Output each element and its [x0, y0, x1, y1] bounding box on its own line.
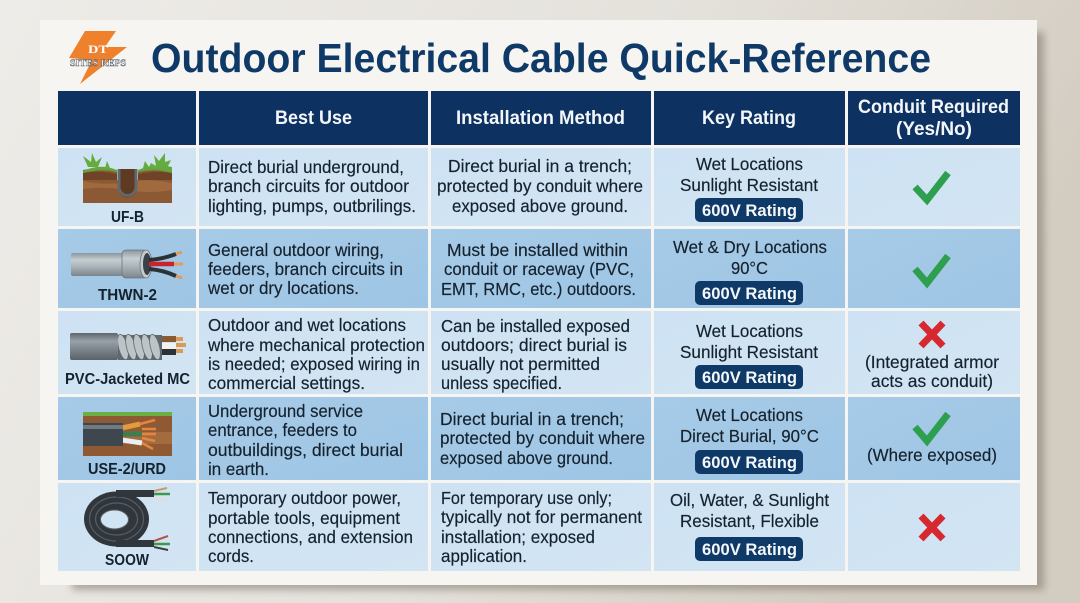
- key rating: USE-2/URD: Direct Burial, 90°C: [680, 426, 819, 446]
- conduit note: PVC-Jacketed MC: (Integrated armor: [865, 352, 999, 372]
- table header row: [58, 91, 1020, 145]
- best use: USE-2/URD: entrance, feeders to: [208, 420, 357, 440]
- best use: PVC-Jacketed MC: [207, 315, 425, 393]
- row: SOOW: [58, 483, 1020, 571]
- key rating: THWN-2: [673, 237, 827, 305]
- best use: THWN-2: feeders, branch circuits in: [208, 259, 403, 279]
- installation: USE-2/URD: Direct burial in a trench;: [440, 409, 624, 429]
- installation: SOOW: application.: [441, 546, 527, 566]
- installation: PVC-Jacketed MC: outdoors; direct burial is: [441, 335, 627, 355]
- installation: UF-B: [437, 156, 643, 216]
- icon: UF-B cable buried in soil: [83, 153, 172, 203]
- conduit note: PVC-Jacketed MC: [865, 352, 999, 391]
- best use: SOOW: Temporary outdoor power,: [208, 488, 401, 508]
- key rating: UF-B: [680, 154, 818, 222]
- best use: USE-2/URD: Underground service: [208, 401, 363, 421]
- installation: THWN-2: conduit or raceway (PVC,: [444, 259, 634, 279]
- best use: PVC-Jacketed MC: is needed; exposed wiring in: [208, 354, 420, 374]
- key rating: SOOW: Resistant, Flexible: [680, 511, 819, 531]
- installation: SOOW: [441, 488, 642, 566]
- key rating: PVC-Jacketed MC: Sunlight Resistant: [680, 342, 818, 362]
- installation: UF-B: exposed above ground.: [452, 196, 628, 216]
- icon: lightning bolt logo: [69, 31, 127, 84]
- key rating: USE-2/URD: Wet Locations: [696, 405, 803, 425]
- best use: UF-B: lighting, pumps, outbrilings.: [208, 196, 416, 216]
- icon: lightning bolt logo: SITES REPS: [70, 58, 126, 68]
- row: USE-2/URD: [58, 397, 1020, 480]
- key rating: USE-2/URD: 600V Rating: [702, 453, 797, 472]
- best use: THWN-2: [207, 240, 403, 298]
- installation: USE-2/URD: protected by conduit where: [440, 428, 645, 448]
- icon: PVC-jacketed MC armored cable: [70, 333, 186, 361]
- installation: SOOW: For temporary use only;: [441, 488, 612, 508]
- best use: THWN-2: wet or dry locations.: [207, 278, 359, 298]
- installation: PVC-Jacketed MC: usually not permitted: [441, 354, 600, 374]
- installation: USE-2/URD: exposed above ground.: [440, 448, 613, 468]
- best use: SOOW: portable tools, equipment: [208, 508, 400, 528]
- installation: UF-B: Direct burial in a trench;: [448, 156, 632, 176]
- installation: PVC-Jacketed MC: unless specified.: [441, 373, 562, 393]
- installation: PVC-Jacketed MC: Can be installed exposed: [441, 316, 630, 336]
- row: THWN-2: [58, 229, 1020, 308]
- label: PVC-Jacketed MC: PVC-Jacketed MC: [65, 371, 190, 388]
- best use: USE-2/URD: [208, 401, 403, 479]
- installation: THWN-2: EMT, RMC, etc.) outdoors.: [441, 279, 636, 299]
- key rating: SOOW: [670, 490, 829, 561]
- best use: UF-B: [208, 157, 416, 216]
- installation: SOOW: typically not for permanent: [441, 507, 642, 527]
- icon: USE-2/URD cable in earth: [83, 412, 172, 456]
- key rating: PVC-Jacketed MC: 600V Rating: [702, 368, 797, 387]
- installation: THWN-2: [441, 240, 636, 299]
- key rating: SOOW: Oil, Water, & Sunlight: [670, 490, 829, 510]
- label: USE-2/URD: USE-2/URD: [88, 461, 166, 478]
- conduit note: PVC-Jacketed MC: acts as conduit): [871, 371, 993, 391]
- row: UF-B: [58, 148, 1020, 226]
- icon: red cross: [921, 323, 943, 346]
- best use: SOOW: connections, and extension: [208, 527, 413, 547]
- best use: UF-B: Direct burial underground,: [208, 157, 404, 177]
- installation: USE-2/URD: [440, 409, 645, 468]
- icon: THWN-2 wires in conduit: [71, 250, 183, 278]
- key rating: UF-B: 600V Rating: [702, 201, 797, 220]
- icon: SOOW coiled cord: [84, 488, 170, 550]
- row: PVC-Jacketed MC: [58, 311, 1020, 394]
- best use: PVC-Jacketed MC: commercial settings.: [208, 373, 365, 393]
- table header row: Best Use: [275, 108, 352, 129]
- icon: green check: [915, 256, 948, 283]
- table header row: Key Rating: [702, 108, 796, 129]
- best use: SOOW: cords.: [208, 546, 254, 566]
- best use: THWN-2: General outdoor wiring,: [208, 240, 384, 260]
- table header row: Installation Method: [456, 108, 625, 129]
- key rating: PVC-Jacketed MC: Wet Locations: [696, 321, 803, 341]
- key rating: THWN-2: 90°C: [731, 258, 768, 278]
- best use: PVC-Jacketed MC: Outdoor and wet locations: [208, 315, 406, 335]
- best use: USE-2/URD: outbuildings, direct burial: [208, 440, 403, 460]
- key rating: UF-B: Sunlight Resistant: [680, 175, 818, 195]
- installation: THWN-2: Must be installed within: [447, 240, 628, 260]
- installation: PVC-Jacketed MC: [441, 316, 630, 393]
- key rating: UF-B: Wet Locations: [696, 154, 803, 174]
- label: SOOW: SOOW: [105, 552, 149, 569]
- key rating: SOOW: 600V Rating: [702, 540, 797, 559]
- installation: SOOW: installation; exposed: [441, 527, 595, 547]
- key rating: PVC-Jacketed MC: [680, 321, 818, 389]
- conduit note: USE-2/URD: (Where exposed): [867, 445, 997, 465]
- key rating: USE-2/URD: [680, 405, 819, 474]
- title: Outdoor Electrical Cable Quick-Reference: [151, 35, 931, 81]
- key rating: THWN-2: 600V Rating: [702, 284, 797, 303]
- key rating: THWN-2: Wet & Dry Locations: [673, 237, 827, 257]
- best use: USE-2/URD: in earth.: [208, 459, 269, 479]
- best use: PVC-Jacketed MC: where mechanical protection: [207, 335, 425, 355]
- best use: SOOW: [208, 488, 413, 566]
- table header row: (Yes/No): [896, 119, 972, 140]
- best use: UF-B: branch circuits for outdoor: [208, 176, 409, 196]
- comparison table: [58, 91, 1020, 571]
- label: THWN-2: THWN-2: [98, 287, 157, 304]
- icon: red cross: [921, 516, 943, 539]
- icon: green check: [915, 414, 948, 441]
- icon: green check: [915, 173, 948, 200]
- icon: lightning bolt logo: DT: [88, 42, 108, 56]
- label: UF-B: UF-B: [111, 209, 144, 226]
- installation: UF-B: protected by conduit where: [437, 176, 643, 196]
- table header row: Conduit Required: [858, 97, 1009, 118]
